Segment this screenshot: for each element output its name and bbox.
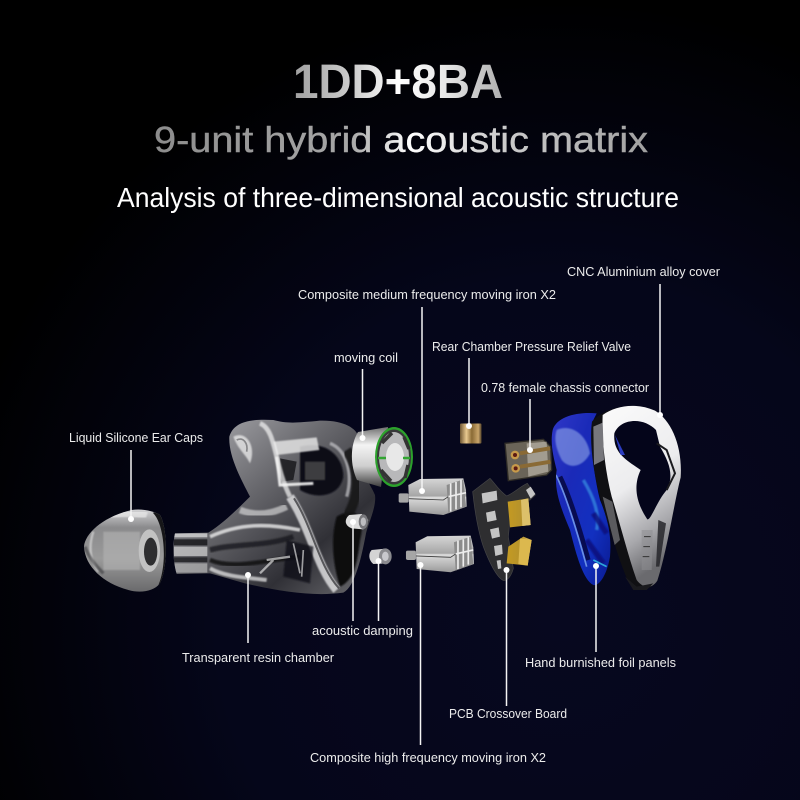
callout: PCB Crossover Board: PCB Crossover Board: [449, 707, 567, 721]
callout: Liquid Silicone Ear Caps: Liquid Silicone Ear Caps: [69, 431, 203, 445]
chassis connector: [505, 439, 552, 481]
acoustic damping: mounted: [346, 514, 368, 529]
acoustic damping: separate: [369, 548, 392, 564]
callout: Transparent resin chamber: Transparent resin chamber: [182, 651, 334, 665]
CNC aluminium alloy cover: [591, 406, 681, 590]
callout: 0.78 female chassis connector: [481, 381, 649, 453]
callout: CNC Aluminium alloy cover: [567, 265, 720, 418]
subtitle: 9-unit hybrid acoustic matrix: [154, 119, 648, 160]
transparent resin chamber: [173, 420, 375, 594]
callout: Composite medium frequency moving iron X2: [298, 288, 556, 494]
callout: Composite high frequency moving iron X2: Composite high frequency moving iron X2: [310, 751, 546, 765]
callout: moving coil: moving coil: [334, 351, 398, 365]
callout: Rear Chamber Pressure Relief Valve: [432, 340, 631, 429]
callout: moving coil: [334, 351, 398, 441]
callout: Hand burnished foil panels: Hand burnished foil panels: [525, 656, 676, 670]
callout: Liquid Silicone Ear Caps: [69, 431, 203, 522]
moving coil driver: [352, 427, 413, 487]
callout: Hand burnished foil panels: [525, 563, 676, 670]
callout: acoustic damping: acoustic damping: [312, 624, 413, 638]
callout: CNC Aluminium alloy cover: CNC Aluminium alloy cover: [567, 265, 720, 279]
heading: analysis: Analysis of three-dimensional acoustic structure: [117, 182, 679, 213]
callout: Rear Chamber Pressure Relief Valve: Rear Chamber Pressure Relief Valve: [432, 340, 631, 354]
hand burnished foil panel: [552, 413, 610, 585]
rear chamber valve: [460, 424, 482, 444]
exploded view of earphone parts: [84, 406, 681, 594]
callout: Composite medium frequency moving iron X2: Composite medium frequency moving iron X2: [298, 288, 556, 302]
high frequency balanced armature: [406, 536, 474, 572]
callout: Composite high frequency moving iron X2: [310, 562, 546, 765]
medium frequency balanced armature: [399, 478, 467, 515]
callout: 0.78 female chassis connector: 0.78 female chassis connector: [481, 381, 649, 395]
title: 1DD+8BA: [293, 56, 503, 109]
callout: Transparent resin chamber: [182, 572, 334, 665]
PCB crossover board: [473, 478, 535, 581]
callout: PCB Crossover Board: [449, 567, 567, 721]
ear cap: [84, 510, 173, 593]
callout: acoustic damping: [312, 519, 413, 638]
